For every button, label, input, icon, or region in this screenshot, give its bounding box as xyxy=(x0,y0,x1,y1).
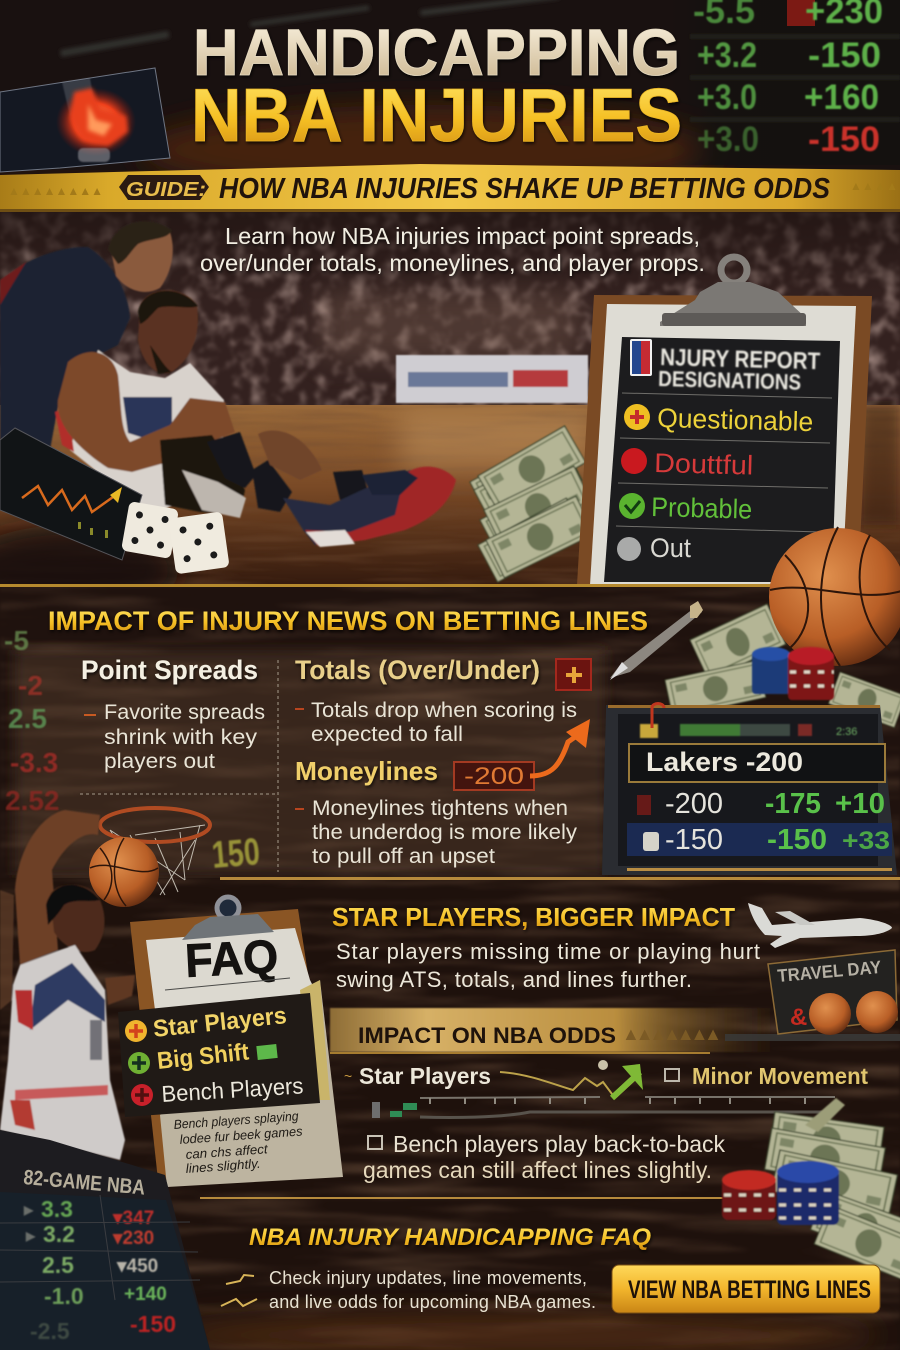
text block: star players xyxy=(336,939,760,992)
heading: NBA injury handicapping FAQ: NBA INJURY HANDICAPPING FAQ xyxy=(249,1224,651,1251)
status: probable: Probable xyxy=(651,492,753,525)
clipboard: injury report designations xyxy=(577,257,872,585)
injured player xyxy=(55,290,456,547)
text block: point spreads: players out xyxy=(104,750,215,773)
status: questionable: Questionable xyxy=(657,403,814,437)
panel: star players and odds xyxy=(0,877,900,1350)
ghost odds ticker at left edge: -5 xyxy=(4,625,29,656)
ghost odds ticker at left edge xyxy=(4,625,262,877)
travel day sign xyxy=(725,950,900,1041)
82-game odds board: 3.3 xyxy=(41,1196,73,1222)
text block: bench players xyxy=(363,1131,726,1183)
basketball in hero xyxy=(769,527,900,666)
chart: star players with arrow xyxy=(344,1060,835,1118)
NBA logo xyxy=(630,339,652,376)
report heading: NJURY REPORT xyxy=(660,344,821,375)
FAQ heading: FAQ xyxy=(184,929,279,987)
knee sleeve and leg xyxy=(160,435,245,515)
handwritten note: can chs affect xyxy=(185,1141,269,1162)
basketball at the hoop xyxy=(89,837,159,907)
arena ad banner xyxy=(396,355,588,403)
text block: moneylines: the underdog is more likely xyxy=(312,821,578,844)
82-game odds board: 3.2 xyxy=(43,1221,75,1247)
dark note panel xyxy=(118,993,320,1117)
handwritten note: Bench players splaying xyxy=(173,1108,300,1132)
banner: guide: ▲▲▲▲ xyxy=(850,179,898,193)
text block: point spreads: Point Spreads xyxy=(81,655,258,685)
text block: star players: Star players missing time or playing hurt xyxy=(336,939,760,964)
title: NBA INJURIES xyxy=(191,73,682,157)
82-game odds board: +140 xyxy=(124,1284,167,1305)
chart: star players with arrow: ~ xyxy=(344,1068,352,1084)
odds scoreboard xyxy=(602,704,897,875)
report black panel xyxy=(604,337,840,582)
icon: airplane xyxy=(748,903,892,948)
82-game odds board: 2.5 xyxy=(42,1252,74,1278)
clipboard metal clip xyxy=(660,257,806,326)
lakers line xyxy=(629,744,885,782)
list: star players: Star Players xyxy=(152,1002,288,1043)
82-game odds board: -2.5 xyxy=(30,1318,70,1344)
82-game odds board: ▶ xyxy=(23,1203,34,1217)
hoop with net xyxy=(100,808,210,895)
82-game odds board: ▾450 xyxy=(116,1256,158,1277)
text block: check updates: Check injury updates, line movements, xyxy=(269,1268,587,1288)
text block: moneylines: Moneylines tightens when xyxy=(312,797,568,820)
text block: bench players: games can still affect lines slightly. xyxy=(363,1157,712,1183)
list: big shift: Big Shift xyxy=(156,1038,250,1075)
text block: totals xyxy=(295,655,591,746)
82-game odds board xyxy=(0,1130,210,1350)
sneakers xyxy=(283,470,430,545)
text block: check updates xyxy=(221,1268,596,1312)
82-game odds board: 82-GAME NBA xyxy=(23,1166,146,1200)
text block: point spreads: Favorite spreads xyxy=(104,701,265,724)
heading: impact of injury news: IMPACT OF INJURY NEWS ON BETTING LINES xyxy=(48,606,648,636)
text block: moneylines xyxy=(295,756,578,868)
82-game odds board: ▾347 xyxy=(112,1208,154,1229)
scoreboard top strip: 2:36 xyxy=(836,726,857,738)
ghost odds ticker at left edge: 150 xyxy=(210,831,262,877)
band: impact on NBA odds xyxy=(330,1008,770,1054)
title xyxy=(191,15,682,157)
odds board: top right xyxy=(670,0,900,165)
cash pile with poker chips xyxy=(722,1098,900,1281)
text block: point spreads xyxy=(81,655,265,773)
pill: guide: GUIDE: xyxy=(126,179,206,201)
mini chart panel xyxy=(0,428,142,560)
82-game odds board: ▶ xyxy=(25,1229,36,1243)
intro text xyxy=(200,223,705,276)
82-game odds board: -1.0 xyxy=(44,1283,84,1309)
pen xyxy=(610,601,703,680)
intro text: over/under totals, moneylines, and player props. xyxy=(200,250,705,276)
text block: totals: expected to fall xyxy=(311,723,463,746)
text block: totals: Totals drop when scoring is xyxy=(311,699,577,722)
heading: star players, bigger impact: STAR PLAYERS, BIGGER IMPACT xyxy=(332,902,735,932)
odds board: top right: -150 xyxy=(808,120,880,159)
handwritten note: lodee fur beek games xyxy=(179,1123,303,1147)
ghost odds ticker at left edge: -2 xyxy=(18,670,43,701)
badge: -200 xyxy=(454,762,534,790)
red hook xyxy=(652,704,664,728)
report heading: DESIGNATIONS xyxy=(658,366,801,395)
odds board: top right: +3.2 xyxy=(697,36,757,75)
travel day sign: TRAVEL DAY xyxy=(777,957,882,986)
odds row 2: +33 xyxy=(842,827,890,855)
clip xyxy=(182,897,274,940)
text block: check updates: and live odds for upcoming NBA games. xyxy=(269,1292,596,1312)
ghost odds ticker at left edge: -3.3 xyxy=(10,747,58,778)
scoreboard top strip xyxy=(640,724,857,738)
odds row 1: -200 xyxy=(665,788,723,820)
text block: moneylines: to pull off an upset xyxy=(312,845,495,868)
ghost odds ticker at left edge: 2.52 xyxy=(5,785,60,816)
text block: point spreads: shrink with key xyxy=(104,726,258,749)
report heading xyxy=(658,344,821,395)
banner: guide: ▲▲▲▲▲▲▲▲ xyxy=(8,184,103,198)
arrow: orange up to totals xyxy=(530,719,590,776)
badge: -200: -200 xyxy=(464,763,524,790)
pill: guide xyxy=(119,175,209,201)
band: impact on NBA odds: ▲▲▲▲▲▲▲ xyxy=(622,1024,722,1044)
banner: guide xyxy=(0,164,900,212)
ghost odds ticker at left edge: 2.5 xyxy=(8,703,47,734)
odds board: top right: +3.0 xyxy=(697,120,759,159)
dunking player xyxy=(0,810,135,1160)
odds row 1: -175 xyxy=(765,788,821,820)
lakers line: Lakers -200 xyxy=(646,747,803,777)
dice xyxy=(121,501,230,574)
82-game odds board: ▾230 xyxy=(112,1228,154,1249)
82-game odds board: -150 xyxy=(130,1311,176,1337)
legend: minor movement: Minor Movement xyxy=(692,1063,868,1089)
list: bench players: Bench Players xyxy=(161,1072,304,1107)
panel: header background xyxy=(0,0,900,195)
cash stack xyxy=(470,426,594,582)
title: HANDICAPPING xyxy=(193,15,680,89)
status: out xyxy=(617,533,691,563)
status: doubtful: Douttful xyxy=(654,448,754,481)
text block: bench players: Bench players play back-to-back xyxy=(393,1131,726,1157)
chart: star players with arrow: Star Players xyxy=(359,1063,491,1089)
odds board: top right: +160 xyxy=(804,78,879,117)
panel: impact of injury news xyxy=(0,584,900,880)
text block: star players: swing ATS, totals, and lines further. xyxy=(336,967,692,992)
handwritten note: lines slightly. xyxy=(185,1156,261,1176)
banner text: HOW NBA INJURIES SHAKE UP BETTING ODDS xyxy=(219,173,831,205)
handwritten note xyxy=(173,1108,303,1176)
note paper xyxy=(160,980,343,1187)
intro text: Learn how NBA injuries impact point spreads, xyxy=(225,223,700,249)
odds row 1 xyxy=(637,788,885,820)
panel: hero arena scene xyxy=(0,212,900,615)
illustration: trainer tending injured player xyxy=(0,221,456,547)
travel day sign: & xyxy=(790,1004,807,1031)
odds row 1: +10 xyxy=(835,788,885,820)
cash behind poker chips xyxy=(665,604,900,728)
FAQ clipboard xyxy=(118,897,343,1187)
poker chips xyxy=(752,647,834,700)
list: big shift xyxy=(128,1038,278,1075)
band: impact on NBA odds: IMPACT ON NBA ODDS xyxy=(358,1023,616,1048)
odds board: top right: +3.0 xyxy=(697,78,757,117)
text block: totals: Totals (Over/Under) xyxy=(295,655,540,685)
text block: moneylines: Moneylines xyxy=(295,756,438,786)
x-ray knee panel xyxy=(0,68,170,172)
trainer in navy polo xyxy=(0,221,173,480)
icon: plus box xyxy=(556,659,591,690)
odds row 2 xyxy=(627,823,892,856)
odds board: top right: -150 xyxy=(808,36,881,75)
arm and hand on knee xyxy=(58,352,235,472)
button: view NBA betting lines xyxy=(612,1265,880,1313)
odds row 2: -150 xyxy=(665,824,723,856)
odds row 2: -150 xyxy=(767,824,827,856)
status: out: Out xyxy=(650,533,691,563)
